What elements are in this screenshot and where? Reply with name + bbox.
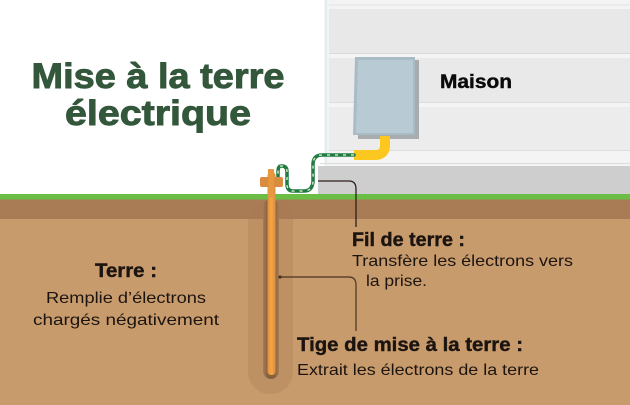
label: Terre: Remplie d’électrons <box>46 290 206 307</box>
ground rod <box>260 169 283 379</box>
house wall <box>318 0 630 195</box>
ground wire <box>278 155 354 191</box>
leader: rod <box>279 276 356 331</box>
leader: ground wire <box>318 181 356 227</box>
ground rod halo <box>248 199 293 394</box>
label: Tige de mise à la terre: Extrait les électrons de la terre <box>297 362 539 379</box>
ground layers <box>0 194 630 405</box>
label: Tige de mise à la terre <box>297 335 539 379</box>
label: Fil de terre: la prise. <box>366 273 427 290</box>
label: Fil de terre: Fil de terre : <box>352 230 465 251</box>
label: Terre: Terre : <box>95 261 157 282</box>
label: Terre: chargés négativement <box>33 312 220 329</box>
label: Terre <box>33 261 220 329</box>
label: Tige de mise à la terre: Tige de mise à la terre : <box>297 335 523 356</box>
label: Maison: Maison <box>440 72 512 93</box>
electrical panel <box>353 57 419 139</box>
title <box>32 57 284 133</box>
title: Mise à la terre <box>32 57 284 96</box>
title: électrique <box>65 94 251 133</box>
label: Fil de terre <box>352 230 573 290</box>
yellow conduit <box>354 136 385 155</box>
label: Fil de terre: Transfère les électrons vers <box>352 253 573 270</box>
